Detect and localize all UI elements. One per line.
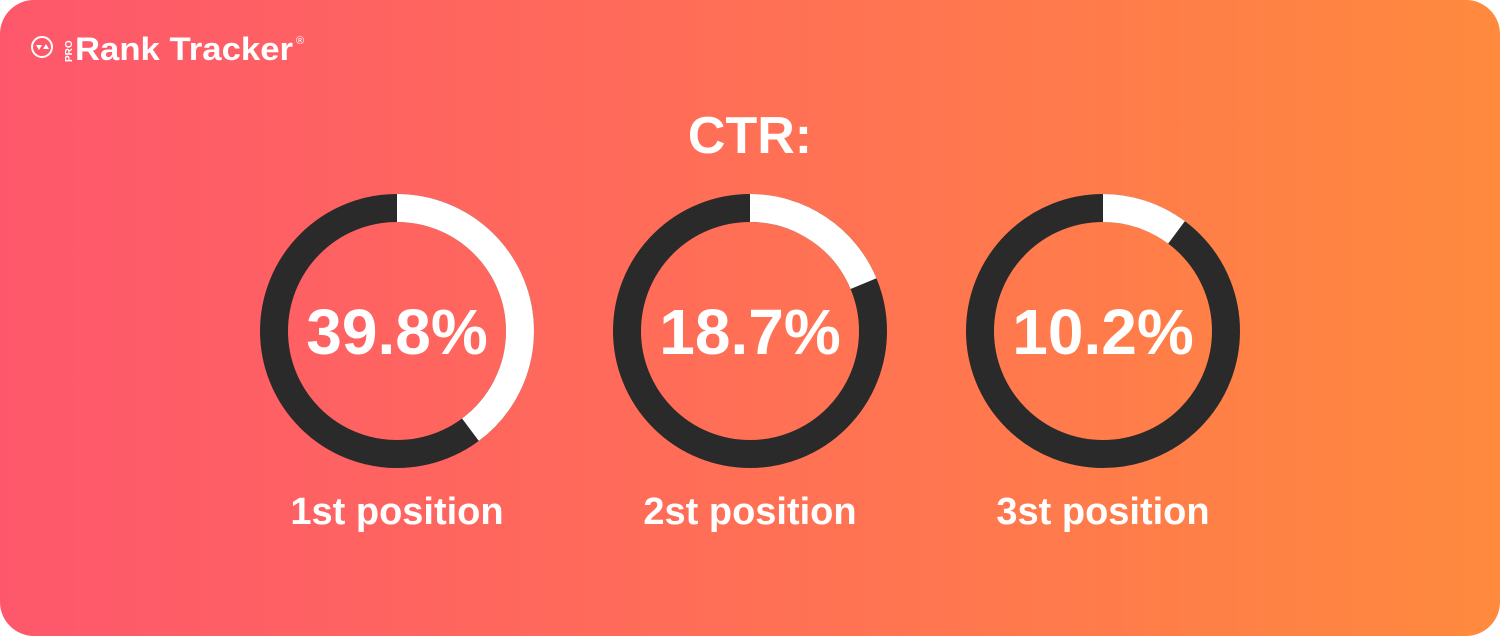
- chart: 1st position: [274, 208, 520, 533]
- chart: 1st position: 1st position: [290, 491, 504, 533]
- logo name: Rank Tracker: [75, 31, 293, 67]
- chart: 3rd position: 10.2%: [1012, 296, 1194, 368]
- chart: 3rd position: [980, 208, 1226, 533]
- chart: 3rd position: 3st position: [996, 491, 1210, 533]
- icon: logo circle: [32, 37, 52, 57]
- logo registered: ®: [296, 35, 304, 47]
- chart: 2nd position: [627, 208, 873, 533]
- logo: [31, 31, 304, 67]
- chart: 2nd position: 18.7%: [659, 296, 841, 368]
- chart: 1st position: 39.8%: [306, 296, 488, 368]
- logo PRO: PRO: [64, 40, 75, 62]
- chart: 2nd position: 2st position: [643, 491, 857, 533]
- title: CTR:: [688, 107, 812, 165]
